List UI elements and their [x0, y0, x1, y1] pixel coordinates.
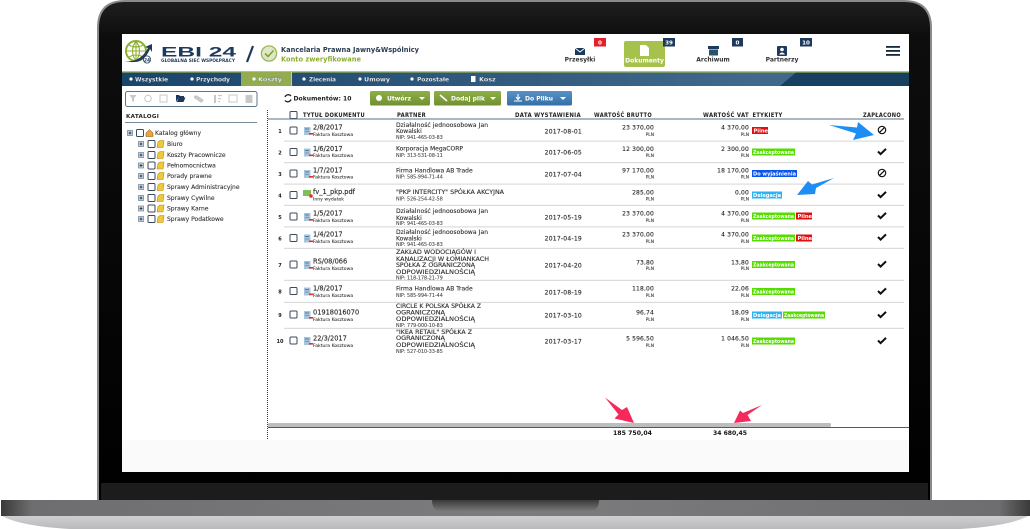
button: Utwórz: Utwórz	[387, 94, 411, 102]
tree item: Sprawy Cywilne: Sprawy Cywilne	[167, 195, 215, 202]
row 3: 3	[278, 172, 282, 178]
row 6: 6	[278, 236, 282, 242]
row 1: 23 370,00	[622, 125, 654, 132]
row 1: 1	[278, 129, 282, 135]
row 1: Pilne	[754, 129, 769, 135]
row 5: PLN	[646, 218, 654, 224]
row 10	[277, 329, 886, 355]
row 7: ODPOWIEDZIALNOŚCIĄ	[396, 269, 476, 276]
row 4	[278, 188, 886, 202]
logo: EBI 24: EBI 24	[161, 44, 236, 60]
row 7: RS/08/066	[313, 257, 347, 265]
row 8: Firma Handlowa AB Trade	[396, 285, 473, 292]
row 10: PLN	[741, 343, 749, 349]
row 2: Faktura Kosztowa	[313, 153, 353, 159]
row 6: 1/4/2017	[313, 230, 343, 238]
menu item: Przesyłki: 0	[598, 40, 602, 46]
row 2: 2 300,00	[721, 146, 749, 153]
row 6: PLN	[646, 239, 654, 245]
row 7: 2017-04-20	[545, 262, 582, 269]
row 2: 1/6/2017	[313, 145, 343, 153]
row 2	[278, 145, 886, 159]
row 9: Faktura Kosztowa	[313, 317, 353, 323]
row 2: Zaakceptowana	[753, 150, 794, 156]
scrollbar	[268, 423, 831, 427]
row 9: 96,74	[636, 309, 654, 316]
row 8: Zaakceptowana	[753, 290, 794, 296]
logo: EBI 24	[125, 41, 236, 64]
totals: 34 680,45	[713, 430, 747, 437]
row 5: Kowalski	[396, 215, 422, 222]
row 1: 2017-08-01	[545, 129, 582, 136]
laptop base	[1, 500, 1030, 529]
row 8: 1/8/2017	[313, 284, 343, 292]
row 7: ZAKŁAD WODOCIĄGÓW I	[396, 249, 476, 256]
row 7: Zaakceptowana	[753, 263, 794, 269]
row 3: 1/7/2017	[313, 166, 343, 174]
row 1: NIP: 941-465-03-83	[396, 135, 443, 141]
row 10: Zaakceptowana	[753, 339, 794, 345]
row 7: Faktura Kosztowa	[313, 266, 353, 272]
row 1: 4 370,00	[721, 125, 749, 132]
row 3: Firma Handlowa AB Trade	[396, 167, 473, 174]
button: Utwórz	[370, 91, 430, 106]
tree root: Katalog główny: Katalog główny	[155, 130, 201, 137]
menu item: Archiwum: Archiwum	[696, 56, 730, 64]
table header: PARTNER	[397, 112, 426, 119]
active tab: Koszty: Koszty	[258, 76, 283, 84]
row 10: 10	[277, 339, 284, 345]
table header: WARTOŚĆ BRUTTO	[594, 112, 652, 119]
table header: ETYKIETY	[752, 112, 783, 119]
row 6: NIP: 941-465-03-83	[396, 242, 443, 248]
table header: DATA WYSTAWIENIA	[515, 112, 581, 119]
row 10: "IKEA RETAIL" SPÓŁKA Z	[396, 329, 472, 336]
menu item: Archiwum	[696, 38, 743, 64]
row 8: 2017-08-19	[545, 289, 582, 296]
row 7: 13,80	[731, 259, 749, 266]
row 6	[278, 229, 886, 248]
row 1: 2/8/2017	[313, 124, 343, 132]
row 6: Pilne	[798, 236, 813, 242]
row 2: Korporacja MegaCORP	[396, 146, 463, 152]
row 4: PLN	[741, 196, 749, 202]
menu item: Partnerzy: 10	[802, 40, 810, 46]
row 4: fv_1_pkp.pdf	[313, 188, 356, 196]
row 5: 4 370,00	[721, 210, 749, 217]
row 5	[278, 208, 886, 227]
row 9: Delegacja	[753, 313, 781, 319]
row 3	[278, 166, 886, 181]
row 8: NIP: 585-994-71-44	[396, 293, 443, 299]
row 4: "PKP INTERCITY" SPÓŁKA AKCYJNA	[396, 189, 505, 196]
active tab: Koszty	[241, 72, 292, 86]
tab: Umowy: Umowy	[364, 76, 391, 84]
row 7: 7	[278, 263, 282, 269]
row 10: Faktura Kosztowa	[313, 343, 353, 349]
row 1	[278, 122, 886, 141]
navigation bar	[122, 71, 909, 86]
row 9: Zaakceptowana	[784, 313, 824, 319]
table: documents	[268, 110, 909, 439]
row 4: 0,00	[735, 189, 749, 196]
row 7: 73,80	[636, 259, 654, 266]
row 9: 9	[278, 313, 282, 319]
row 9: 18,09	[731, 309, 749, 316]
row 7: SPÓŁKA Z OGRANICZONĄ	[396, 262, 476, 269]
row 3: PLN	[741, 175, 749, 181]
panel: catalog tree	[125, 114, 257, 223]
row 5: NIP: 941-465-03-83	[396, 221, 443, 227]
row 7: NIP: 118-178-21-79	[396, 276, 443, 282]
row 5: Pilne	[798, 214, 813, 220]
row 2: 2017-06-05	[545, 149, 582, 156]
verified account: Konto zweryfikowane	[281, 56, 361, 64]
row 8	[278, 284, 886, 299]
tree item: Biuro: Biuro	[167, 141, 183, 148]
row 8: PLN	[646, 293, 654, 299]
documents count: Dokumentów: 10	[294, 94, 352, 102]
row 4: 4	[278, 194, 282, 200]
totals: 185 750,04	[613, 430, 652, 437]
row 5: Faktura Kosztowa	[313, 218, 353, 224]
row 9: OGRANICZONĄ	[396, 309, 446, 316]
row 3: NIP: 585-994-71-44	[396, 175, 443, 181]
menu item: Dokumenty	[624, 38, 675, 67]
row 5: PLN	[741, 218, 749, 224]
menu item: Partnerzy: Partnerzy	[766, 56, 798, 64]
row 2: PLN	[646, 153, 654, 159]
row 7: PLN	[741, 266, 749, 272]
row 9: 01918016070	[313, 308, 359, 316]
tab: Kosz: Kosz	[479, 76, 496, 84]
table header: WARTOŚĆ VAT	[703, 112, 749, 119]
row 9: 2017-03-10	[545, 312, 582, 319]
lid chin	[101, 483, 928, 500]
row 5: 23 370,00	[622, 210, 654, 217]
button: Do Pliku	[507, 91, 572, 106]
row 7: PLN	[646, 266, 654, 272]
row 8: 8	[278, 290, 282, 296]
icon: verified check	[261, 46, 277, 61]
arrow: blue to status	[829, 122, 874, 140]
row 6: Działalność jednoosobowa Jan	[396, 229, 488, 236]
row 8: Faktura Kosztowa	[313, 293, 353, 299]
trackpad notch	[432, 500, 599, 511]
row 2: 12 300,00	[622, 146, 654, 153]
row 8: 118,00	[632, 285, 654, 292]
arrow: pink to gross total	[605, 398, 634, 423]
row 9: NIP: 779-000-10-83	[396, 323, 443, 329]
row 10: 22/3/2017	[313, 334, 347, 342]
row 10: 2017-03-17	[545, 338, 582, 345]
screen	[122, 34, 909, 472]
row 9: ODPOWIEDZIALNOŚCIĄ	[396, 316, 476, 323]
menu item: Partnerzy	[766, 38, 812, 64]
icon: hamburger menu	[886, 46, 900, 56]
row 5: Działalność jednoosobowa Jan	[396, 208, 488, 215]
logo: EBI 24: GLOBALNA SIEĆ WSPÓŁPRACY	[161, 58, 236, 63]
menu item: Przesyłki: Przesyłki	[565, 56, 595, 64]
row 8: 22,06	[731, 285, 749, 292]
row 4: NIP: 526-254-42-58	[396, 196, 443, 202]
row 3: 18 170,00	[717, 167, 749, 174]
tree item: Sprawy Administracyjne: Sprawy Administracyjne	[167, 184, 240, 191]
verified account: Kancelaria Prawna Jawny&Wspólnicy	[281, 46, 419, 54]
arrow: pink to VAT total	[734, 405, 762, 423]
menu item: Archiwum: 0	[736, 40, 740, 46]
row 3: 97 170,00	[622, 167, 654, 174]
row 2: PLN	[741, 153, 749, 159]
tree item: Koszty Pracownicze: Koszty Pracownicze	[167, 152, 226, 159]
heading: Katalogi: KATALOGI	[126, 114, 159, 120]
menu item: Dokumenty: Dokumenty	[625, 58, 664, 64]
row 4: PLN	[646, 196, 654, 202]
slash separator	[247, 46, 253, 62]
table header: ZAPŁACONO	[863, 112, 901, 119]
row 7: KANALIZACJI W ŁOMIANKACH	[396, 256, 489, 263]
row 8: PLN	[741, 293, 749, 299]
row 4: Delegacja	[753, 193, 781, 199]
tree item: Sprawy Podatkowe: Sprawy Podatkowe	[167, 216, 224, 223]
row 10: 5 596,50	[626, 335, 654, 342]
row 3: Do wyjaśnienia	[753, 171, 796, 178]
row 5: 5	[278, 215, 282, 221]
row 6: 23 370,00	[622, 231, 654, 238]
row 9: PLN	[741, 317, 749, 323]
row 10: 1 046,50	[721, 335, 749, 342]
row 1: PLN	[741, 132, 749, 138]
row 6: PLN	[741, 239, 749, 245]
verified account	[261, 46, 419, 64]
tab: Kosz	[471, 76, 496, 84]
row 3: PLN	[646, 175, 654, 181]
row 10: NIP: 527-010-33-85	[396, 349, 443, 355]
filter toolbar	[126, 92, 257, 106]
row 10: OGRANICZONĄ	[396, 335, 446, 342]
tree item: Pełnomocnictwa: Pełnomocnictwa	[167, 162, 216, 170]
tree item: Sprawy Karne: Sprawy Karne	[167, 206, 209, 212]
row 1: Faktura Kosztowa	[313, 132, 353, 138]
row 5: 1/5/2017	[313, 209, 343, 217]
row 6: Zaakceptowana	[753, 236, 794, 242]
row 1: PLN	[646, 132, 654, 138]
row 9	[278, 303, 886, 329]
tree item: Porady prawne: Porady prawne	[167, 173, 212, 180]
row 1: Działalność jednoosobowa Jan	[396, 122, 488, 129]
row 1: Kowalski	[396, 128, 422, 135]
menu item: Dokumenty: 39	[665, 40, 673, 46]
row 4: Inny wydatek	[313, 196, 344, 202]
row 5: 2017-05-19	[545, 214, 582, 221]
row 10: PLN	[646, 343, 654, 349]
arrow: blue to tag	[797, 178, 834, 195]
row 2: NIP: 313-531-08-11	[396, 153, 443, 159]
row 10: ODPOWIEDZIALNOŚCIĄ	[396, 342, 476, 349]
row 3: 2017-07-04	[545, 171, 582, 178]
row 6: 4 370,00	[721, 231, 749, 238]
row 4: 285,00	[632, 189, 654, 196]
button: Dodaj plik: Dodaj plik	[451, 94, 486, 102]
row 7	[278, 249, 886, 282]
tab: Przychody: Przychody	[196, 76, 231, 84]
button: Dodaj plik	[434, 91, 501, 106]
totals	[613, 430, 747, 437]
menu item: Przesyłki	[565, 38, 606, 64]
table header	[268, 112, 904, 120]
row 6: Kowalski	[396, 235, 422, 242]
row 6: Faktura Kosztowa	[313, 239, 353, 245]
tab: Pozostałe: Pozostałe	[417, 76, 450, 84]
laptop lid	[97, 0, 932, 500]
row 2: 2	[278, 150, 282, 156]
tab: Wszystkie: Wszystkie	[135, 76, 169, 84]
row 5: Zaakceptowana	[753, 214, 794, 220]
table header: TYTUŁ DOKUMENTU	[303, 112, 365, 119]
top menu	[565, 38, 900, 67]
icon: globe: 24	[144, 58, 150, 64]
row 9: PLN	[646, 317, 654, 323]
row 3: Faktura Kosztowa	[313, 175, 353, 181]
row 9: CIRCLE K POLSKA SPÓŁKA Z	[396, 303, 481, 310]
button: Do Pliku: Do Pliku	[525, 94, 553, 102]
row 6: 2017-04-19	[545, 235, 582, 242]
tab: Zlecenia: Zlecenia	[309, 76, 336, 84]
